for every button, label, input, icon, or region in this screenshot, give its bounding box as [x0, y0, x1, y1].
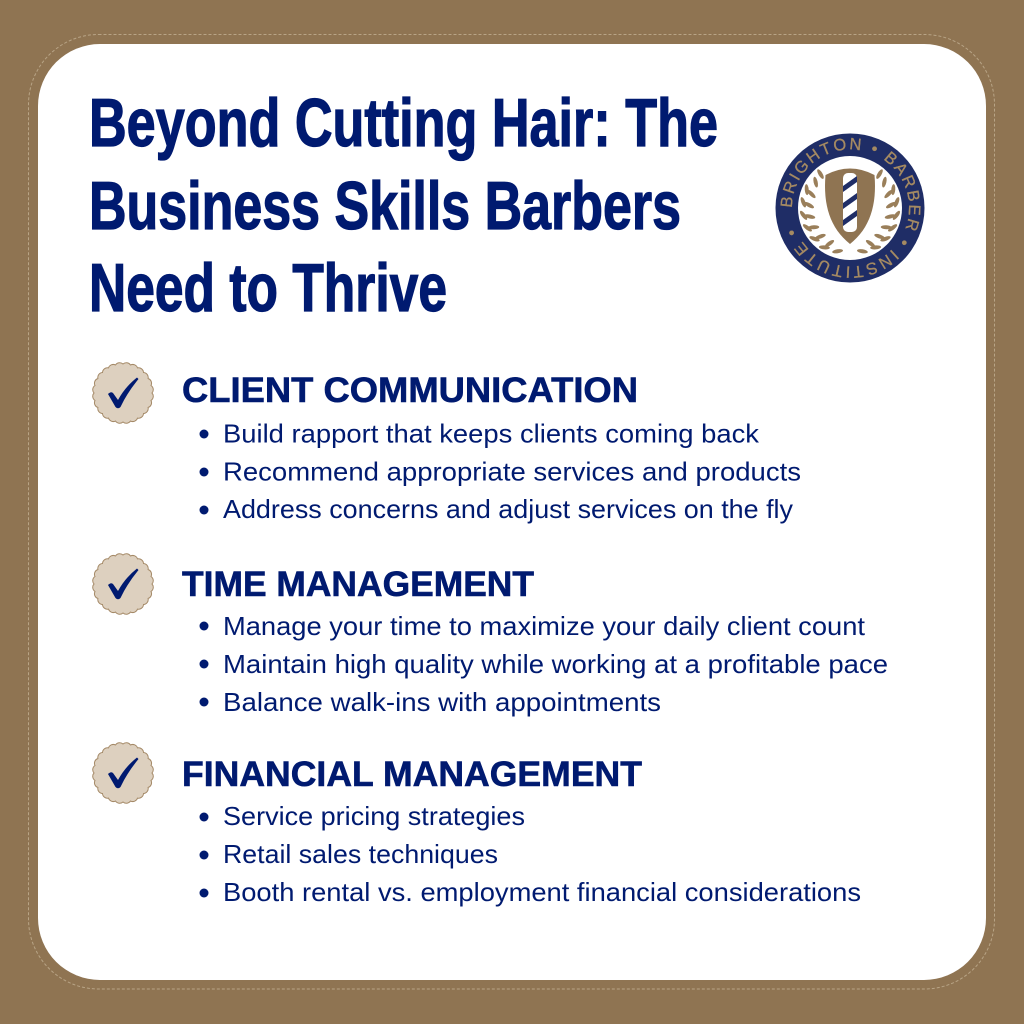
section: financial management: [93, 743, 861, 907]
bullet list: Address concerns and adjust services on the fly: [223, 494, 793, 524]
title: Beyond Cutting Hair: The: [89, 85, 718, 161]
bullet list: Retail sales techniques: [223, 839, 498, 869]
bullet list: [200, 611, 888, 717]
bullet list: Balance walk-ins with appointments: [223, 687, 661, 717]
section: time management: [93, 554, 888, 717]
bullet list: [200, 801, 861, 907]
icon: check badge: [93, 363, 153, 423]
logo: Brighton Barber Institute badge: BRIGHTON • BARBER • INSTITUTE •: [780, 138, 921, 278]
heading: TIME MANAGEMENT: [182, 565, 534, 604]
bullet list: Recommend appropriate services and products: [223, 456, 801, 486]
heading: FINANCIAL MANAGEMENT: [182, 755, 642, 794]
bullet list: Service pricing strategies: [223, 801, 525, 831]
heading: CLIENT COMMUNICATION: [182, 371, 638, 410]
section: client communication: [93, 363, 801, 524]
bullet list: Build rapport that keeps clients coming back: [223, 418, 760, 448]
icon: check badge: [93, 554, 153, 614]
title: [89, 85, 718, 326]
title: Business Skills Barbers: [89, 168, 681, 244]
bullet list: Manage your time to maximize your daily client count: [223, 611, 866, 641]
bullet list: Maintain high quality while working at a profitable pace: [223, 649, 888, 679]
icon: check badge: [93, 743, 153, 803]
bullet list: Booth rental vs. employment financial considerations: [223, 877, 861, 907]
bullet list: [200, 418, 801, 524]
title: Need to Thrive: [89, 250, 447, 326]
